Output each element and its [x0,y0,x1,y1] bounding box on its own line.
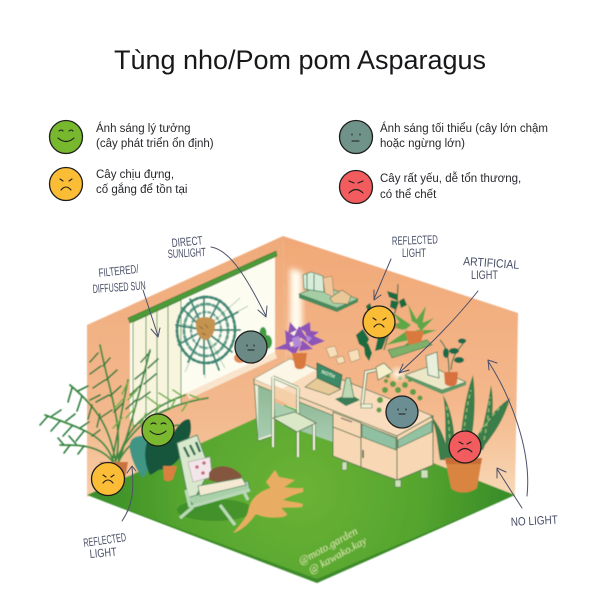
bottle on tray [335,378,360,406]
floor signature: @moto.garden [297,525,360,568]
room illustration [40,236,518,583]
wall shelf with books [299,272,358,312]
label: artificial light: ARTIFICIAL [463,254,520,272]
desk plant [376,374,422,412]
legend item: very weak [340,170,521,204]
window [128,251,277,426]
legend item: tolerating [50,168,187,200]
arrow: direct sunlight [211,247,267,317]
sleeping dog [233,470,303,533]
drawer [333,412,361,438]
floor [87,405,515,583]
arrow: no light short [497,468,522,508]
legend item: ideal light: Ánh sáng lý tưởng [96,122,191,135]
face: ideal by monstera [142,414,174,446]
legend item: minimal light: hoặc ngừng lớn) [380,138,465,150]
arrow: reflected light bottom [122,466,136,521]
green back panel under desk [298,398,333,442]
legend [50,120,548,204]
arrow: filtered sun [143,290,160,337]
label: direct sunlight: DIRECT [171,233,204,250]
legend item: minimal light [340,120,548,154]
cabinet feet [342,462,428,487]
face: minimal light near window [235,331,267,363]
trailing plant behind yellow face [356,284,407,361]
label: reflected light bottom: REFLECTED [82,530,127,550]
sticky notes [326,346,360,364]
label: no light [488,360,559,529]
label: reflected light top [374,232,438,300]
legend item: very weak: Cây rất yếu, dễ tổn thương, [380,172,521,185]
label: reflected light bottom [82,466,136,561]
legend item: minimal light: Ánh sáng tối thiểu (cây lớn chậm [380,122,548,135]
arrow: reflected light top [374,259,391,300]
desk lamp [361,363,408,408]
arrow: no light long [488,360,528,496]
title: Tùng nho/Pom pom Asparagus [114,45,486,75]
legend item: ideal light: (cây phát triển ổn định) [96,138,214,150]
face: minimal on desk [386,396,418,428]
palm plant [40,345,208,490]
shelf with books and plant [405,338,466,394]
face: tolerating by palm [92,462,124,496]
label: artificial light [399,254,520,373]
label: artificial light: LIGHT [471,268,499,282]
laptop [305,363,342,395]
desk [254,359,433,487]
legend item: very weak: có thể chết [380,189,437,201]
cabinet front [333,427,361,467]
label: reflected light top: LIGHT [402,246,426,260]
legend item: ideal light [50,120,214,154]
face: very weak on pot [449,431,481,463]
monstera plant [130,418,191,481]
label: filtered diffused sun [92,262,160,337]
window sill [187,352,277,399]
snake plant with pot [430,375,510,492]
chair shadow [177,499,253,521]
small cactus on sill [260,327,272,349]
arrow: artificial light [399,291,478,373]
purple flowering plant [274,322,325,369]
desk top [254,359,433,436]
wall plant in pot [383,304,437,358]
hanging pom pom plant [176,296,248,378]
label: no light: NO LIGHT [510,513,559,529]
legend item: tolerating: cố gắng để tồn tại [96,183,187,196]
label: reflected light bottom: LIGHT [89,545,118,561]
cabinet glass [362,424,396,450]
label: filtered diffused sun: DIFFUSED SUN [92,278,146,296]
orange pot behind grey face [234,353,246,363]
armchair [177,435,253,525]
face: tolerating at wall plant [363,306,395,338]
cabinet side [397,416,433,480]
label: direct sunlight: SUNLIGHT [167,245,207,261]
left desk leg panel [254,379,273,441]
desk front strip [254,379,397,441]
label: direct sunlight [167,233,267,317]
small desk chair [273,377,316,457]
vertical blinds [133,300,181,426]
curtain rail [128,251,277,323]
label: filtered diffused sun: FILTERED/ [98,262,140,280]
legend item: tolerating: Cây chịu đựng, [96,169,174,181]
left wall [87,236,287,497]
laptop: NOTH [320,369,336,380]
floor signature: @ kawako.kay [307,535,369,577]
floor lower edge shading [87,495,515,583]
light patch on wall corner [290,268,302,355]
right wall [283,236,518,497]
label: reflected light top: REFLECTED [392,232,438,248]
